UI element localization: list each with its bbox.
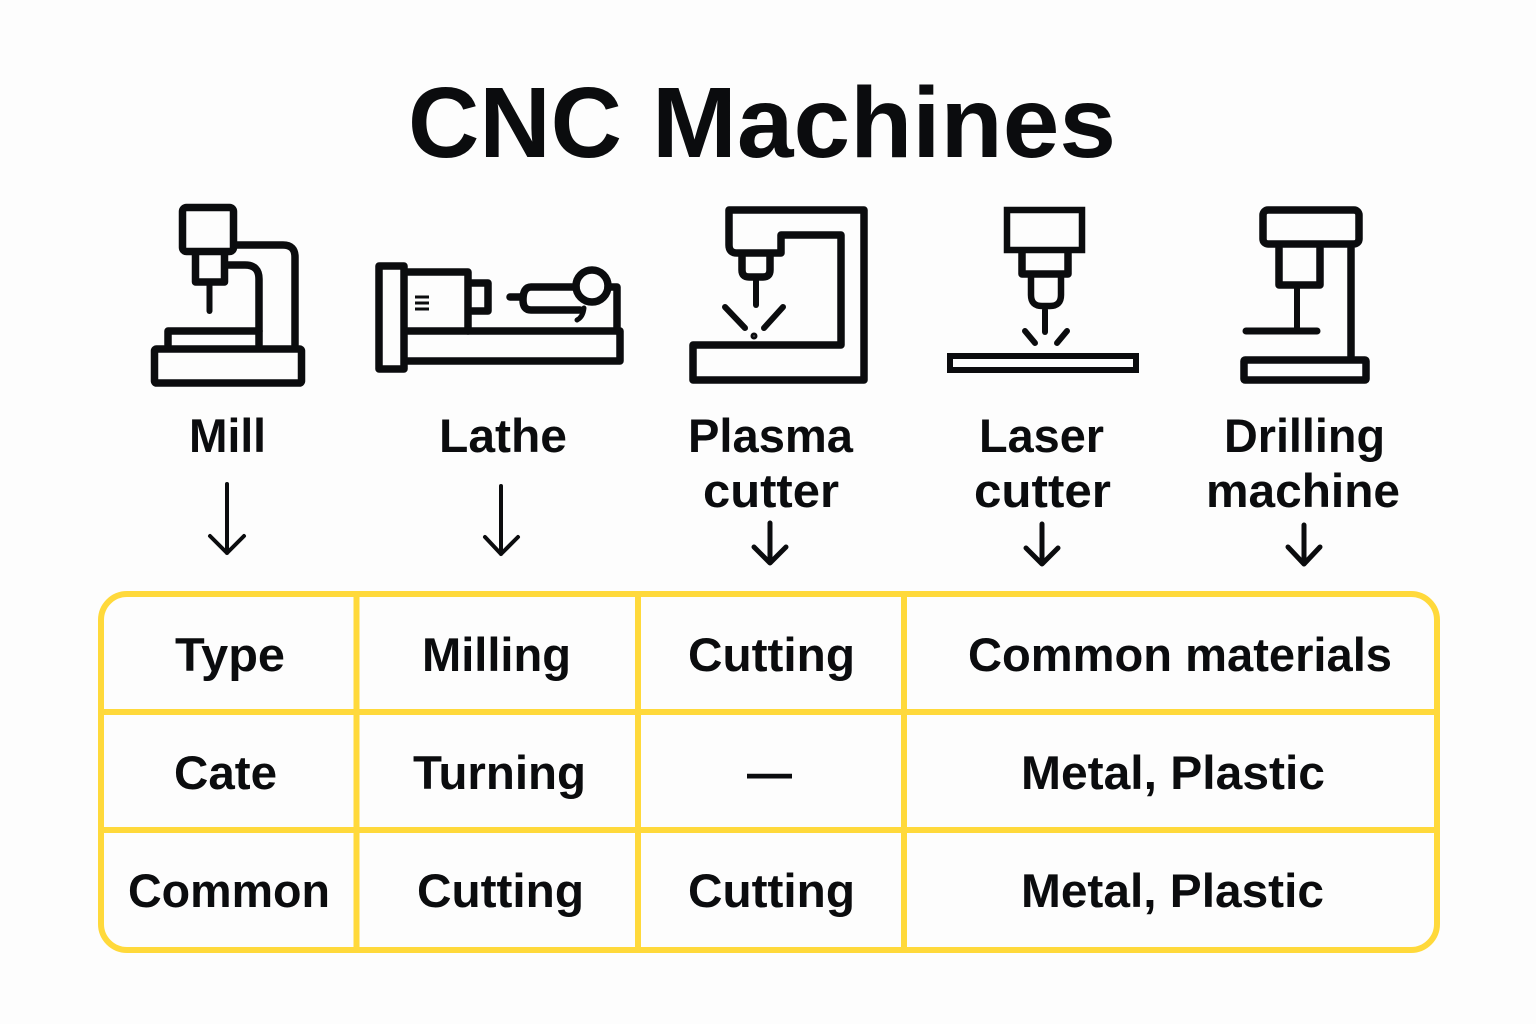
arrow: plasma cutter xyxy=(754,523,786,563)
label: mill: Mill xyxy=(189,409,266,462)
label: laser cutter: cutter xyxy=(974,464,1111,517)
row 3: Common: Metal, Plastic xyxy=(1021,864,1324,917)
title: Machines xyxy=(652,67,1116,179)
row 1: Type: Common materials xyxy=(968,628,1392,681)
label: laser cutter xyxy=(974,409,1111,517)
icon: plasma cutter xyxy=(693,210,864,380)
arrow: mill xyxy=(210,484,244,553)
arrow: laser cutter xyxy=(1026,524,1058,564)
row 2: Cate: Turning xyxy=(413,746,586,799)
row 1: Type: Type xyxy=(175,628,285,681)
label: laser cutter: Laser xyxy=(979,409,1104,462)
row 3: Common xyxy=(128,864,1324,917)
arrow: drilling machine xyxy=(1288,525,1320,564)
row 2: Cate xyxy=(174,746,1325,799)
label: drilling machine: machine xyxy=(1206,464,1400,517)
icon: laser cutter xyxy=(950,210,1136,370)
comparison table xyxy=(101,594,1437,950)
row 3: Common: Cutting xyxy=(688,864,855,917)
label: plasma cutter: cutter xyxy=(703,464,839,517)
label: plasma cutter xyxy=(688,409,854,517)
label: plasma cutter: Plasma xyxy=(688,409,854,462)
arrow: lathe xyxy=(485,486,518,554)
title: CNC xyxy=(408,67,622,179)
icon: mill xyxy=(154,208,302,383)
row 1: Type: Milling xyxy=(422,628,571,681)
row 2: Cate: Metal, Plastic xyxy=(1021,746,1325,799)
label: lathe: Lathe xyxy=(439,409,567,462)
row 3: Common: Common xyxy=(128,864,330,917)
icon: drilling machine xyxy=(1244,210,1366,380)
icon: lathe xyxy=(379,266,620,369)
label: drilling machine: Drilling xyxy=(1224,409,1385,462)
row 1: Type: Cutting xyxy=(688,628,855,681)
row 3: Common: Cutting xyxy=(417,864,584,917)
table grid xyxy=(101,594,1437,950)
row 2: Cate: Cate xyxy=(174,746,277,799)
label: drilling machine xyxy=(1206,409,1400,517)
title xyxy=(408,67,1116,179)
row 1: Type xyxy=(175,628,1392,681)
row 2: Cate: — xyxy=(747,746,792,799)
